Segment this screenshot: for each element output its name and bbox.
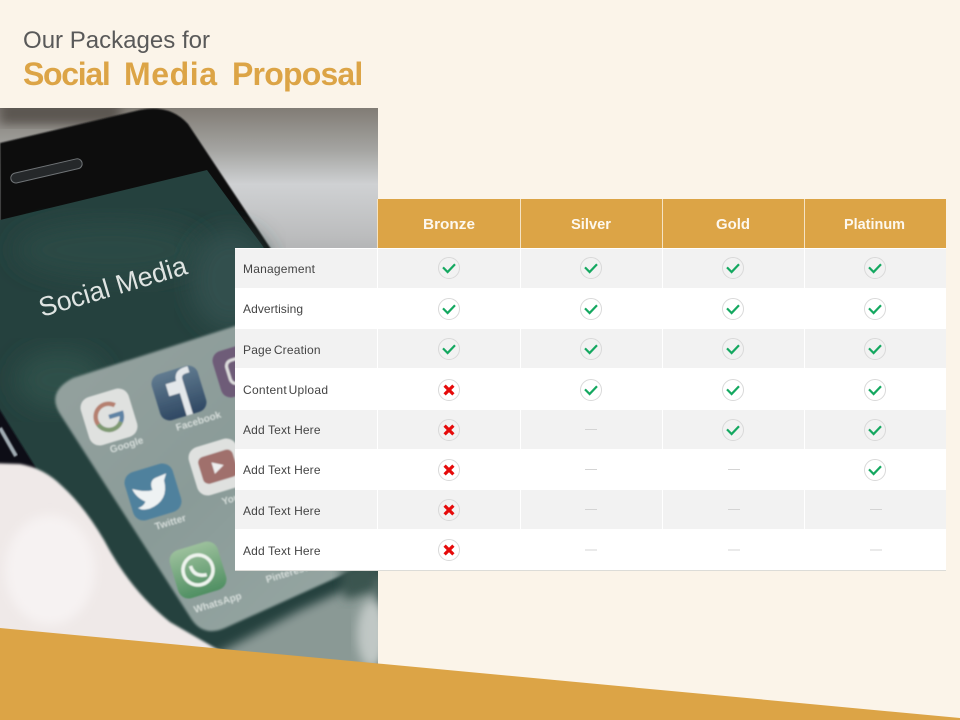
header: Silver: Silver [571,216,611,233]
app: YouTube [188,438,235,496]
row labels [243,262,328,558]
app labels: WhatsApp [193,591,243,616]
label: Add Text Here 2: Add Text Here [243,463,321,477]
header: Platinum: Platinum [844,216,905,233]
title line: Our Packages for: Our Packages for [23,27,210,54]
app: Twitter [124,463,182,521]
Gold column marks [722,258,744,550]
app labels: Pinterest [265,563,309,586]
label: Content Upload: Content Upload [243,383,328,397]
hand [0,461,220,648]
app: WhatsApp [169,541,227,599]
label: Add Text Here 3: Add Text Here [243,504,321,518]
app folder [54,324,351,633]
speaker [10,158,83,184]
label: Advertising: Advertising [243,302,303,316]
title line: Social Media Proposal: Proposal [232,56,363,92]
header: Gold: Gold [716,216,750,233]
label: Page Creation: Page Creation [243,343,320,357]
photo: phone showing social media apps [0,108,378,664]
label: Add Text Here 4: Add Text Here [243,544,321,558]
table rows background [235,248,946,570]
title line: Social Media Proposal: Media [124,56,218,92]
left phone edge [0,409,36,468]
app: Facebook [151,365,208,422]
app labels: Twitter [154,513,188,533]
app: Instagram [212,346,235,398]
app labels: Google [109,435,145,456]
screen text: Social Media: Social Media [35,250,191,323]
Bronze column marks [438,258,460,560]
Platinum column marks [864,258,886,550]
phone body [0,108,272,248]
title line: Social Media Proposal: Social [23,56,109,92]
title [23,27,363,92]
phone screen [0,170,378,650]
label: Add Text Here 1: Add Text Here [243,423,321,437]
app labels: You [221,492,241,508]
app: Google [80,388,138,446]
label: Management: Management [243,262,316,276]
finger [352,595,378,664]
header: Bronze: Bronze [423,216,475,233]
pricing table [235,199,946,570]
table header [378,199,946,248]
Silver column marks [580,258,602,550]
blurred lower right background [217,574,378,664]
bottom gold band [0,628,960,720]
app labels: Facebook [175,410,223,434]
app labels [109,410,309,616]
